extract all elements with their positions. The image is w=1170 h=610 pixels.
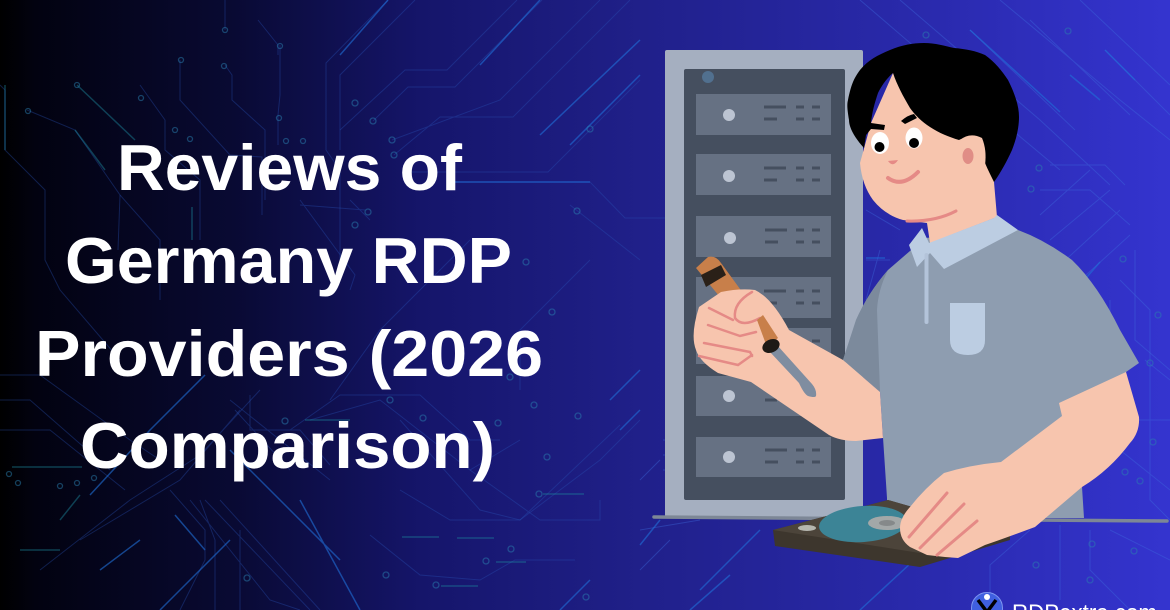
hard disk bbox=[773, 500, 1010, 567]
icon: logo badge bbox=[972, 592, 1002, 610]
person bbox=[694, 43, 1139, 567]
server unit 1 bbox=[696, 94, 831, 135]
title bbox=[35, 131, 543, 482]
finger lines bbox=[699, 292, 760, 365]
server unit 7 bbox=[696, 437, 831, 477]
hair bbox=[847, 43, 1019, 182]
shirt shadow sleeve bbox=[843, 270, 888, 392]
server unit 3 bbox=[696, 216, 831, 257]
placket bbox=[924, 255, 928, 322]
title: Reviews of bbox=[117, 131, 462, 204]
knuckle lines bbox=[909, 493, 977, 555]
ear bbox=[960, 135, 986, 168]
eyes bbox=[871, 128, 922, 154]
server rack bbox=[665, 50, 863, 518]
collar bbox=[909, 215, 1018, 269]
logo: RDPextra.com bbox=[972, 592, 1157, 610]
desk shelf line bbox=[654, 517, 1167, 521]
pocket bbox=[950, 303, 985, 355]
server unit 2 bbox=[696, 154, 831, 195]
screwdriver ferrule and shaft bbox=[760, 336, 816, 397]
title: Germany RDP bbox=[65, 224, 512, 297]
screwdriver grip over fist bbox=[757, 315, 778, 347]
title: Providers (2026 bbox=[35, 317, 543, 390]
nose bbox=[888, 160, 898, 164]
neck and face bbox=[860, 70, 997, 243]
screwdriver handle bbox=[696, 257, 770, 342]
left forearm and hand bbox=[694, 289, 883, 441]
jaw line bbox=[907, 211, 956, 221]
eyebrow bbox=[901, 114, 917, 124]
right arm and hand bbox=[900, 372, 1139, 558]
server unit 6 bbox=[696, 376, 831, 416]
server unit 5 bbox=[696, 328, 831, 364]
title: Comparison) bbox=[80, 409, 495, 482]
server unit 4 bbox=[696, 277, 831, 318]
smile bbox=[888, 172, 918, 182]
shirt bbox=[843, 230, 1139, 518]
